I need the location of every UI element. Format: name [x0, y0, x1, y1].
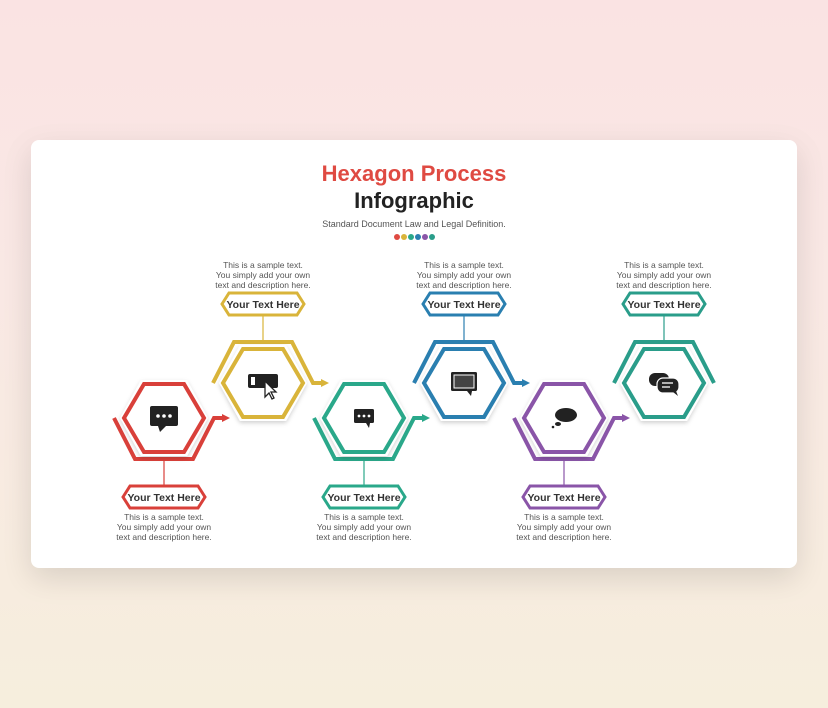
step 2: yellow: Your Text Here — [226, 299, 300, 311]
step 3: green: Your Text Here — [327, 492, 401, 504]
step 5: purple — [514, 380, 630, 542]
step 4: blue: This is a sample text. — [424, 260, 504, 270]
step 1: red: This is a sample text. — [124, 512, 204, 522]
icon: chat bubble — [150, 406, 178, 432]
step 2: yellow: This is a sample text. — [223, 260, 303, 270]
step 6: teal: text and description here. — [616, 280, 712, 290]
step 1: red: You simply add your own — [117, 522, 211, 532]
step 3: green: You simply add your own — [317, 522, 411, 532]
icon: screen bubble — [451, 372, 477, 396]
step 6: teal: Your Text Here — [627, 299, 701, 311]
step 1: red: Your Text Here — [127, 492, 201, 504]
title — [322, 161, 506, 229]
icon: small chat bubble — [354, 409, 374, 428]
step 5: purple: Your Text Here — [527, 492, 601, 504]
icon: click button — [248, 374, 278, 399]
step 4: blue — [414, 260, 530, 421]
step 3: green: text and description here. — [316, 532, 412, 542]
step 6: teal: You simply add your own — [617, 270, 711, 280]
step 2: yellow: text and description here. — [215, 280, 311, 290]
step 1: red: text and description here. — [116, 532, 212, 542]
step 4: blue: text and description here. — [416, 280, 512, 290]
step 5: purple: This is a sample text. — [524, 512, 604, 522]
step 2: yellow: You simply add your own — [216, 270, 310, 280]
step 6: teal — [614, 260, 714, 421]
title: Standard Document Law and Legal Definition. — [322, 219, 506, 229]
step 5: purple: You simply add your own — [517, 522, 611, 532]
step 5: purple: text and description here. — [516, 532, 612, 542]
step 4: blue: Your Text Here — [427, 299, 501, 311]
step 4: blue: You simply add your own — [417, 270, 511, 280]
icon: two chat bubbles — [649, 373, 679, 396]
panel: card — [31, 140, 797, 568]
color dots — [394, 234, 435, 240]
icon: thought bubble — [552, 408, 577, 428]
step 3: green: This is a sample text. — [324, 512, 404, 522]
step 2: yellow — [213, 260, 329, 421]
title: Hexagon Process — [322, 161, 506, 186]
title: Infographic — [354, 188, 474, 213]
step 3: green — [314, 380, 430, 542]
step 1: red — [114, 380, 230, 542]
step 6: teal: This is a sample text. — [624, 260, 704, 270]
